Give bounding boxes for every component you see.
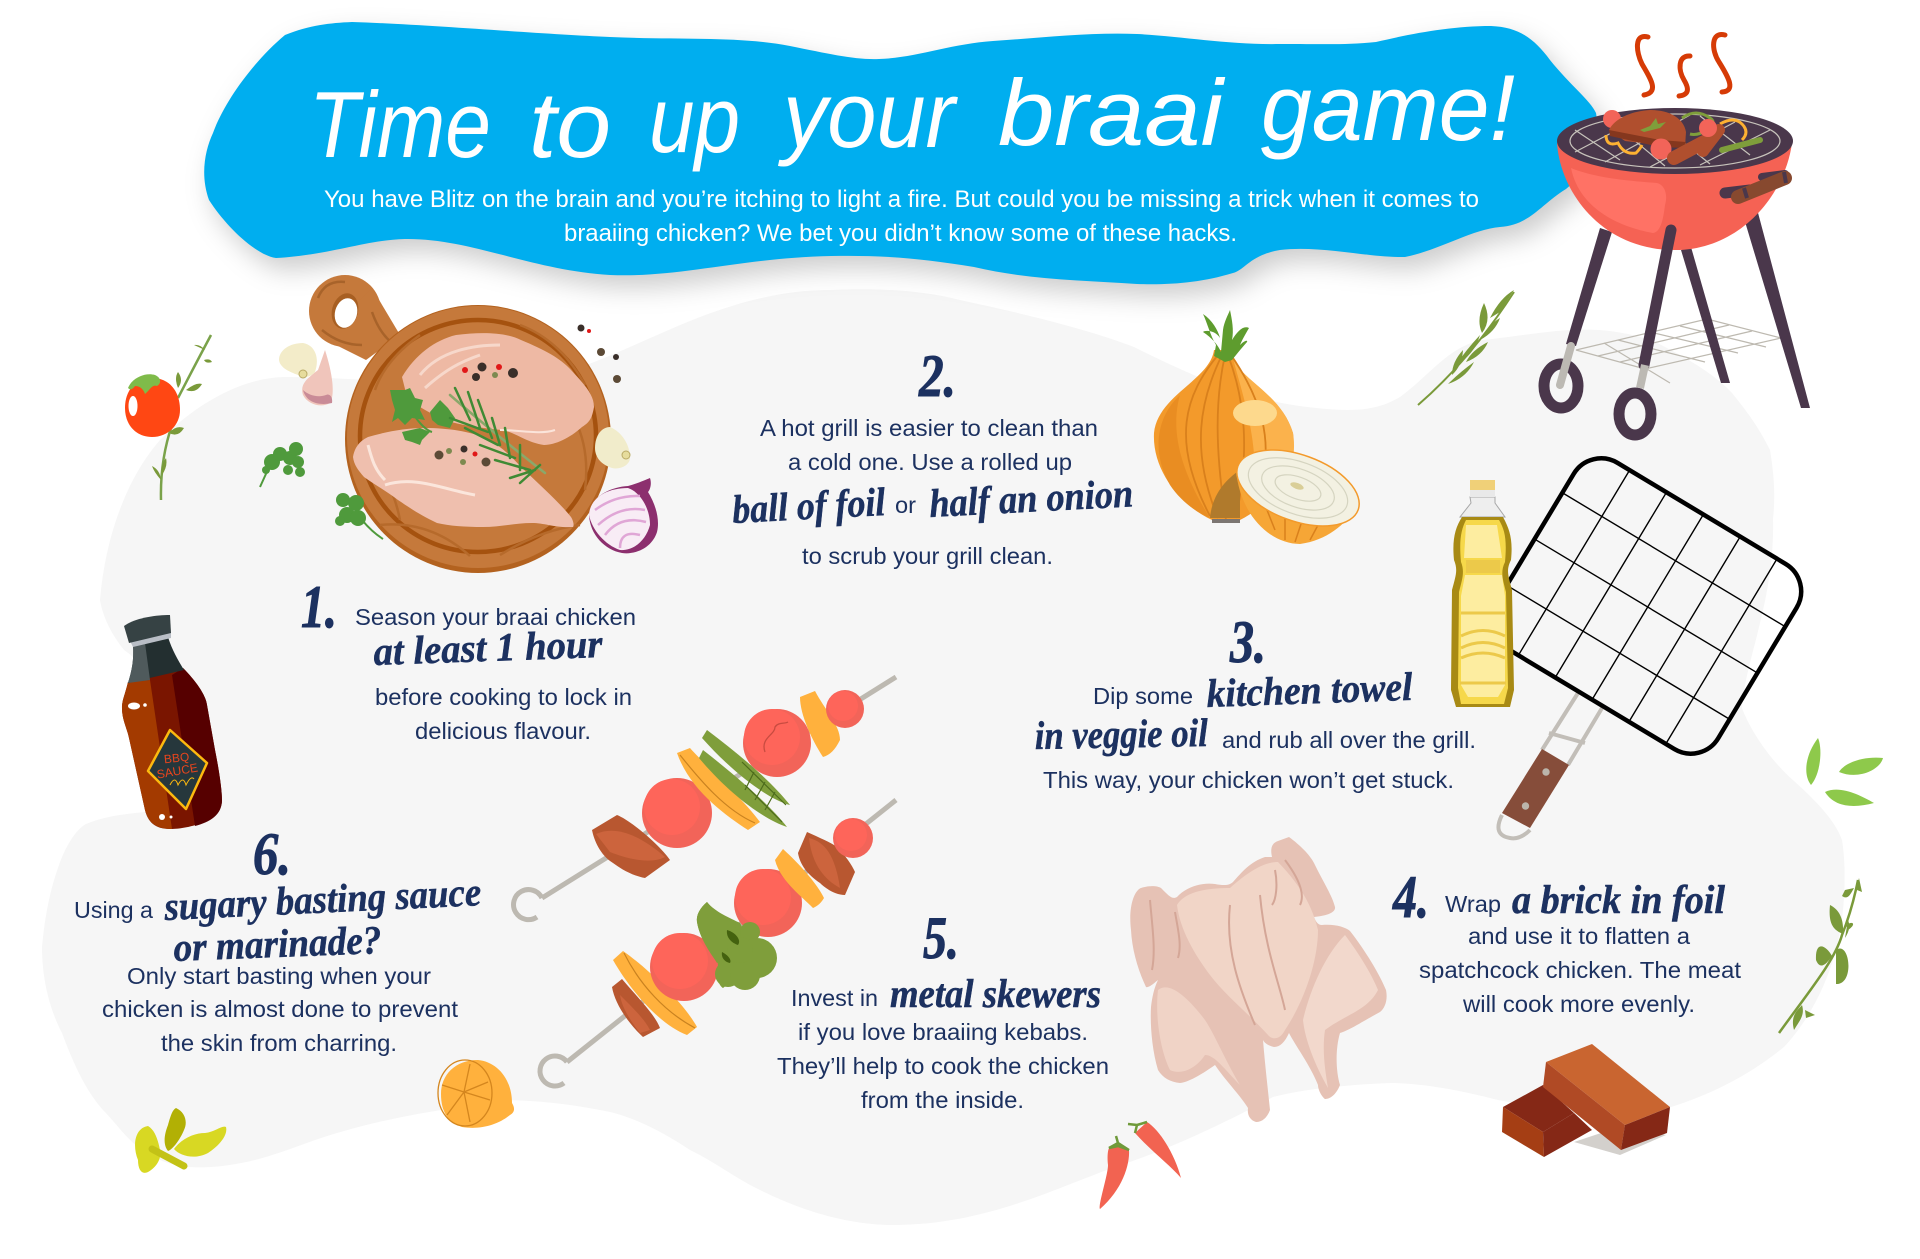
step 5 text [777, 971, 1109, 1113]
cut half onion [1227, 435, 1369, 544]
step 4 text [1419, 877, 1742, 1017]
title: braai [998, 60, 1225, 165]
banner shape [204, 22, 1597, 284]
step 4 text: and use it to flatten a [1468, 923, 1690, 949]
step 1 text: Season your braai chicken [355, 604, 636, 630]
number 4: 4. [1392, 864, 1429, 930]
icon: parsley lower [335, 493, 383, 539]
meat [798, 832, 855, 895]
title: up [649, 67, 740, 172]
step 5 text: They’ll help to cook the chicken [777, 1053, 1109, 1079]
upper brick [1543, 1044, 1670, 1150]
basket frame [1479, 446, 1813, 766]
step 4 text: spatchcock chicken. The meat [1419, 957, 1742, 983]
step 4 text: a brick in foil [1512, 877, 1726, 922]
panel: grey background blob [42, 289, 1845, 1225]
step 3 text [1034, 664, 1476, 793]
chicken right thigh [1303, 935, 1378, 1088]
step 3 text: in veggie oil [1034, 710, 1209, 758]
step 1 text: delicious flavour. [415, 718, 591, 744]
icon: rosemary sprig top [1418, 290, 1514, 405]
step 5 text: metal skewers [890, 971, 1101, 1016]
ball [642, 778, 712, 848]
number 3: 3. [1229, 609, 1266, 675]
step 4 text: will cook more evenly. [1462, 991, 1695, 1017]
step 2 text: a cold one. Use a rolled up [788, 449, 1072, 475]
chicken breast upper [402, 333, 594, 445]
sauce label: SAUCE [156, 761, 199, 782]
icon: lemon [438, 1060, 514, 1128]
text block: step 5 [777, 905, 1109, 1113]
icon: bricks [1502, 1044, 1670, 1157]
step 2 text: ball of foil [731, 479, 887, 532]
step 6 text [74, 869, 482, 1056]
text block: step 2 [731, 343, 1134, 569]
brick shadow [1574, 1125, 1666, 1155]
skewer rod [540, 800, 896, 1086]
front left leg and wheel [1544, 228, 1612, 408]
meat [592, 815, 670, 878]
icon: garlic clove right [595, 427, 630, 468]
step 2 text [731, 415, 1134, 569]
bowl [1557, 143, 1792, 250]
subtitle: You have Blitz on the brain and you’re itching to light a fire. But could you be missing a trick when it comes to [324, 186, 1479, 213]
icon: scattered pepper [578, 324, 621, 383]
title: Time [309, 72, 491, 177]
number 1: 1. [301, 574, 337, 640]
board [345, 305, 611, 573]
pepper [775, 849, 824, 908]
icon: spatchcock chicken [1130, 837, 1387, 1122]
ball [650, 933, 718, 1001]
step 5 text: from the inside. [861, 1087, 1024, 1113]
basket handle [1498, 693, 1602, 838]
text block: step 3 [1034, 609, 1476, 793]
peppercorns [434, 362, 518, 466]
title: game! [1261, 55, 1515, 160]
icon: grill rack under barbecue [1576, 319, 1781, 383]
step 1 text: before cooking to lock in [375, 684, 632, 710]
step 3 text: Dip some [1093, 683, 1193, 709]
lid top [1557, 108, 1793, 174]
step 6 text: Only start basting when your [127, 963, 431, 989]
step 4 text: Wrap [1445, 891, 1501, 917]
back legs [1681, 209, 1810, 408]
chicken body [1177, 862, 1318, 1038]
meat [612, 979, 660, 1037]
broccoli florets [697, 902, 777, 990]
icon: yellow leaves [135, 1108, 226, 1173]
step 1 text: at least 1 hour [373, 621, 604, 674]
step 2 text: or [895, 492, 916, 518]
icon: steam [1637, 34, 1730, 96]
step 6 text: sugary basting sauce [162, 869, 482, 929]
text block: step 4 [1392, 864, 1742, 1017]
onion skin lines [1186, 355, 1266, 520]
skewer rod [514, 677, 896, 920]
pepper [677, 748, 760, 830]
step 6 text: chicken is almost done to prevent [102, 996, 459, 1022]
number 6: 6. [253, 821, 291, 887]
pepper [800, 691, 840, 757]
sauce label: BBQ [163, 750, 190, 766]
subtitle [324, 186, 1479, 247]
step 1 text [355, 604, 636, 744]
icon: garlic [279, 343, 333, 405]
icon: red onion [589, 478, 658, 553]
step 3 text: kitchen towel [1206, 664, 1414, 716]
text block: step 6 [74, 821, 482, 1056]
icon: sauce bottle [122, 615, 222, 829]
lower brick [1502, 1085, 1592, 1157]
broccoli leaf [697, 902, 760, 988]
grilled food [1603, 110, 1760, 160]
handle [1725, 172, 1786, 198]
icon: oil bottle [1451, 480, 1514, 707]
step 3 text: and rub all over the grill. [1222, 727, 1476, 753]
asparagus [702, 730, 790, 805]
onion sprouts [1203, 310, 1249, 362]
title: your [777, 62, 958, 167]
cooking grate [1570, 114, 1780, 168]
step 6 text: or marinade? [173, 917, 382, 970]
step 5 text: Invest in [791, 985, 878, 1011]
step 2 text: half an onion [928, 470, 1134, 526]
front middle leg and wheel [1619, 230, 1671, 435]
title [309, 55, 1515, 177]
panel: blue title banner [204, 22, 1605, 296]
small ball [833, 818, 873, 858]
subtitle: braaiing chicken? We bet you didn’t know some of these hacks. [564, 220, 1237, 247]
icon: herb sprig right [1779, 878, 1862, 1033]
parsley on board [390, 388, 455, 445]
icon: green leaves right [1806, 738, 1883, 806]
chicken skin folds [1150, 860, 1302, 1025]
board handle [309, 275, 381, 347]
rosemary on board [450, 388, 545, 483]
title: to [529, 72, 611, 177]
pepper [613, 951, 697, 1035]
ball [734, 869, 802, 937]
step 2 text: to scrub your grill clean. [802, 543, 1053, 569]
icon: kettle barbecue [1544, 34, 1810, 435]
number 2: 2. [918, 343, 956, 409]
number 5: 5. [923, 905, 959, 971]
step 5 text: if you love braaiing kebabs. [798, 1019, 1088, 1045]
icon: cutting board with chicken breasts [309, 275, 611, 573]
ball [743, 709, 811, 777]
icon: onion [1154, 310, 1369, 544]
text block: step 1 [301, 574, 636, 744]
icon: skewer one [514, 677, 896, 920]
step 6 text: the skin from charring. [161, 1030, 397, 1056]
icon: tomato on sprig [125, 335, 212, 500]
chicken left thigh [1157, 987, 1240, 1085]
small ball [826, 690, 864, 728]
step 6 text: Using a [74, 897, 153, 923]
icon: skewer two [540, 800, 896, 1086]
icon: chilli peppers [1100, 1122, 1181, 1209]
wood grain [365, 325, 586, 556]
sauce label [148, 730, 207, 809]
banner shadow [212, 34, 1605, 296]
icon: grill basket [1479, 446, 1813, 838]
icon: parsley sprig left [260, 442, 305, 487]
step 2 text: A hot grill is easier to clean than [760, 415, 1098, 441]
step 3 text: This way, your chicken won’t get stuck. [1043, 767, 1454, 793]
chicken breast lower [353, 428, 574, 527]
bowl highlight [1571, 168, 1666, 233]
